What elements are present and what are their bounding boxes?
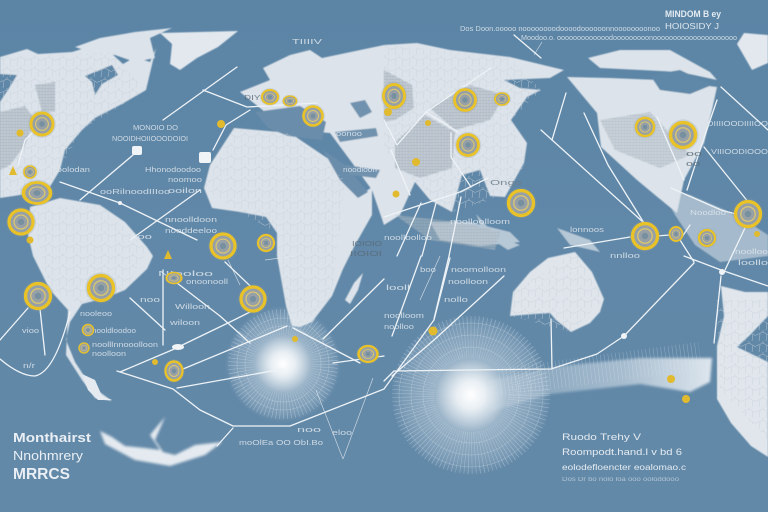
hatch: right continent (600, 112, 690, 168)
Pacific inlet (0, 74, 17, 102)
top header text strip: MINDOM B ey (665, 9, 721, 19)
map labels: noolloon (92, 349, 126, 358)
inlet right (650, 70, 712, 94)
marker cluster: Europe (301, 104, 325, 128)
land: southern tip (82, 374, 112, 400)
label: Europe and Middle East: DIYOT (244, 93, 275, 102)
land: northern archipelago right (588, 50, 717, 80)
map labels: Hhonodoodoo (145, 165, 201, 174)
map labels: noomoo (168, 175, 202, 184)
map labels: nooldloodoo (92, 326, 136, 335)
label: Indian Ocean: noomolloon (451, 265, 506, 274)
route nodes (118, 146, 725, 350)
caption bottom middle: eloo (332, 428, 352, 437)
title block bottom left (13, 430, 92, 483)
top header text strip: Dos Doon.ooooo noooooooodoooodoooooonnoooooooonoo (460, 24, 660, 33)
marker cluster: Africa (208, 231, 238, 261)
map labels: noolloom (384, 311, 424, 320)
map labels: IIOIOI (350, 249, 382, 258)
map labels: noolloon (448, 277, 488, 286)
hatched regions (0, 70, 690, 250)
caption bottom middle: noo (297, 425, 321, 434)
map labels: nooddeeloo (165, 226, 217, 235)
top header text strip: HOIOSIDY J (665, 22, 719, 31)
map labels: noo (130, 232, 152, 241)
map labels: Noodloo (690, 208, 726, 217)
Black Sea and Gulf (335, 100, 380, 178)
marker cluster: Asia (381, 82, 407, 110)
label: Arctic: TIIIIV (292, 37, 322, 46)
Hudson Bay (85, 65, 118, 95)
map labels: NOOIDHOIIOOODOIOI (112, 134, 188, 143)
land: South America (28, 198, 153, 401)
marker cluster: right continent (634, 116, 656, 138)
small gold dots (9, 108, 760, 403)
routes: Pacific (541, 130, 644, 223)
map labels: nooleoo (80, 309, 112, 318)
burst: right hub with tail (391, 315, 712, 475)
map labels: noolloo (735, 247, 768, 256)
Mediterranean and Red Sea (255, 106, 368, 198)
map labels: lonnoos (570, 225, 604, 234)
caption bottom middle: moOlEa OO ObI.Bo (239, 438, 323, 447)
marker cluster: Americas (28, 110, 56, 138)
top header text strip: Moodoo.o. ooooooooooooodooooooooonooooooooooooooooooooo (521, 33, 737, 42)
text block bottom right: Dos Dr bo nolo loa ooo ooloddooo (562, 477, 680, 483)
map labels (22, 37, 768, 370)
routes: top right (514, 35, 541, 58)
routes: Indian Ocean (392, 256, 421, 336)
land: Greenland (160, 31, 238, 70)
hatch: North America west (0, 106, 35, 170)
map labels: noo (140, 295, 160, 304)
map labels: vioo (22, 326, 39, 335)
coin markers (6, 82, 764, 403)
land: top right island (737, 33, 768, 70)
title block bottom left: MRRCS (13, 466, 70, 483)
map labels: ooilon (168, 186, 202, 195)
map labels: wiloon (169, 318, 200, 327)
map labels: noolllnnooolloon (92, 340, 158, 349)
burst: left hub (225, 306, 341, 422)
text block bottom right: eolodefloencter eoalomao.c (562, 462, 687, 472)
map labels: oo (686, 149, 702, 158)
map labels: nnoolldoon (165, 215, 217, 224)
label: South America side: NIooloo (158, 269, 213, 278)
map labels: noolloo (384, 322, 414, 331)
hatch: North America centre (35, 82, 55, 112)
routes: Asia (384, 68, 491, 145)
map labels: noolloolloom (450, 217, 510, 226)
hatch: Indochina (395, 215, 500, 250)
map labels: noolloolloo (384, 233, 432, 242)
hatch: South Asia (395, 115, 455, 178)
map labels: boo (420, 265, 436, 274)
map labels: IOIOIO (352, 239, 382, 248)
title block bottom left: Monthairst (13, 430, 92, 445)
map labels: onoonooll (186, 277, 228, 286)
map labels: oonoo (336, 129, 362, 138)
land: Australia (510, 252, 604, 332)
top header text strip (460, 9, 737, 42)
Arctic islands (75, 28, 172, 62)
map labels: VIIIOODIOOO (711, 147, 768, 156)
map labels: looll (386, 283, 411, 292)
bottom land wisp (100, 417, 222, 466)
map labels: ooRilnoodIIIoo (100, 187, 170, 196)
text block bottom right: Ruodo Trehy V (562, 432, 642, 443)
land: Southeast Asian islands (430, 214, 600, 252)
land: bottom right continent (717, 286, 768, 457)
title block bottom left: Nnohmrery (13, 448, 84, 463)
label: Asia: Ongo (490, 178, 522, 187)
routes: South Atlantic (177, 283, 250, 343)
hatch: Central Asia (384, 70, 505, 130)
label: mid Atlantic: MONOIO DO (133, 123, 178, 132)
land: North America (0, 48, 156, 198)
text block bottom right: Roompodt.hand.l v bd 6 (562, 447, 682, 458)
land: Central America right (660, 188, 768, 262)
map labels: noodloon (343, 165, 377, 174)
routes: Atlantic (130, 190, 200, 240)
caption bottom middle (239, 425, 352, 447)
label: right continent: DIIIIOODIIIIOO (707, 119, 768, 128)
map labels: nollo (444, 295, 468, 304)
map labels: oo (686, 159, 700, 168)
text block bottom right (562, 432, 687, 483)
land: Madagascar (345, 273, 363, 304)
land: right continent (567, 77, 717, 213)
map labels: nnlloo (610, 251, 640, 260)
land: Eurasia (240, 43, 564, 225)
land: Africa (204, 128, 372, 327)
map labels: n/r (23, 361, 36, 370)
map labels: loollo (738, 258, 768, 267)
map labels: Roolodan (50, 165, 90, 174)
map labels: Willoon (175, 302, 210, 311)
land cell texture (0, 45, 768, 440)
